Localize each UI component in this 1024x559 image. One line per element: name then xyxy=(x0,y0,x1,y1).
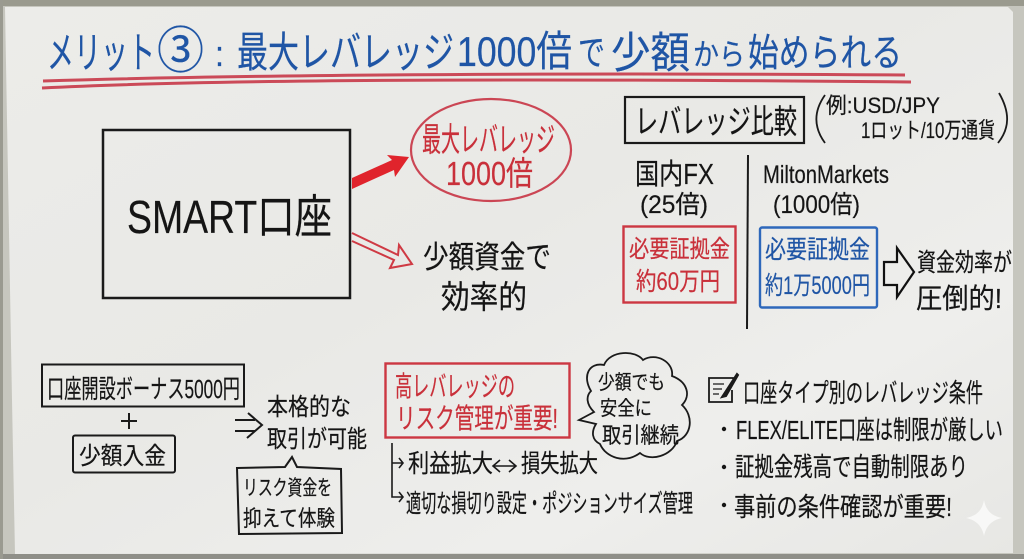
panel: MiltonMarkets margin: 約1万5000円 xyxy=(765,272,870,300)
note: example USD/JPY: 例:USD/JPY xyxy=(826,93,940,118)
title: : xyxy=(215,33,224,74)
text: profit and loss expansion: 利益拡大 xyxy=(408,450,493,478)
panel: MiltonMarkets margin: 必要証拠金 xyxy=(765,236,870,264)
column: domestic FX xyxy=(635,158,714,219)
column: MiltonMarkets: (1000倍) xyxy=(773,191,860,219)
speech box: limit risk capital: 抑えて体験 xyxy=(243,506,335,531)
title: で xyxy=(578,32,605,73)
box: account bonus xyxy=(42,364,244,406)
divider line between columns xyxy=(747,155,748,329)
panel: high leverage risk management xyxy=(386,364,570,438)
icon: notepad and pencil xyxy=(709,374,738,402)
text: profit and loss expansion xyxy=(408,450,598,478)
text: capital efficiency conclusion: 圧倒的! xyxy=(916,283,1002,314)
text: efficient with small capital xyxy=(423,240,551,315)
arrow: block arrow to conclusion xyxy=(884,248,914,297)
box: account bonus: 口座開設ボーナス5000円 xyxy=(47,374,240,404)
title: から xyxy=(693,39,745,72)
panel: high leverage risk management: リスク管理が重要! xyxy=(396,403,558,434)
icon: sparkle xyxy=(966,500,1002,536)
title: メリット xyxy=(47,30,155,78)
callout: max leverage xyxy=(411,99,571,201)
thought bubble: continue safely: 安全に xyxy=(600,397,652,420)
arrow: outline red to small capital xyxy=(352,233,412,268)
text: efficient with small capital: 少額資金で xyxy=(423,240,551,275)
list: account conditions xyxy=(722,415,1003,522)
column: domestic FX: 国内FX xyxy=(635,158,714,191)
text: capital efficiency conclusion xyxy=(916,249,1012,314)
tree connector arrows xyxy=(392,443,403,502)
thought bubble: continue safely xyxy=(579,353,690,459)
panel: high leverage risk management: 高レバレッジの xyxy=(395,371,515,402)
speech box: limit risk capital xyxy=(237,457,342,534)
column: domestic FX: (25倍) xyxy=(640,191,708,219)
title: 最大レバレッジ xyxy=(237,29,454,76)
title: ③ xyxy=(157,23,204,79)
text: efficient with small capital: 効率的 xyxy=(441,279,527,315)
text: stop loss and position size: 適切な損切り設定・ポジションサイズ管理 xyxy=(406,490,693,518)
text: profit and loss expansion: 損失拡大 xyxy=(521,450,598,478)
speech box: limit risk capital: リスク資金を xyxy=(243,477,332,500)
list: account conditions: 事前の条件確認が重要! xyxy=(734,492,952,522)
arrow: double arrow to full trading xyxy=(235,413,262,438)
heading: leverage comparison xyxy=(625,97,804,143)
thought bubble: continue safely: 取引継続 xyxy=(602,423,679,448)
thought bubble: continue safely: 少額でも xyxy=(598,371,665,394)
panel: domestic FX margin: 約60万円 xyxy=(636,268,720,296)
panel: domestic FX margin: 必要証拠金 xyxy=(629,236,730,263)
title: 1000倍 xyxy=(457,28,572,75)
title xyxy=(47,23,902,79)
text: full-scale trading possible: 取引が可能 xyxy=(267,426,367,453)
box: small deposit xyxy=(73,436,175,472)
note: example USD/JPY xyxy=(816,93,1007,143)
title double underline xyxy=(42,74,911,88)
column: MiltonMarkets: MiltonMarkets xyxy=(763,161,889,189)
panel: SMART account: SMART口座 xyxy=(127,191,332,243)
column: MiltonMarkets xyxy=(763,161,889,219)
panel: domestic FX margin xyxy=(624,226,736,302)
title: 始められる xyxy=(748,33,902,75)
callout: max leverage: 最大レバレッジ xyxy=(422,121,555,158)
heading: leverage comparison: レバレッジ比較 xyxy=(635,103,797,140)
box: small deposit: 少額入金 xyxy=(79,443,166,470)
arrow: solid red to max leverage xyxy=(352,155,409,189)
text: full-scale trading possible: 本格的な xyxy=(267,394,351,421)
text: full-scale trading possible xyxy=(267,394,367,453)
panel: MiltonMarkets margin xyxy=(760,228,877,308)
panel: SMART account xyxy=(103,130,350,298)
callout: max leverage: 1000倍 xyxy=(446,155,533,192)
title: 少額 xyxy=(611,30,690,78)
plus sign xyxy=(121,413,137,429)
